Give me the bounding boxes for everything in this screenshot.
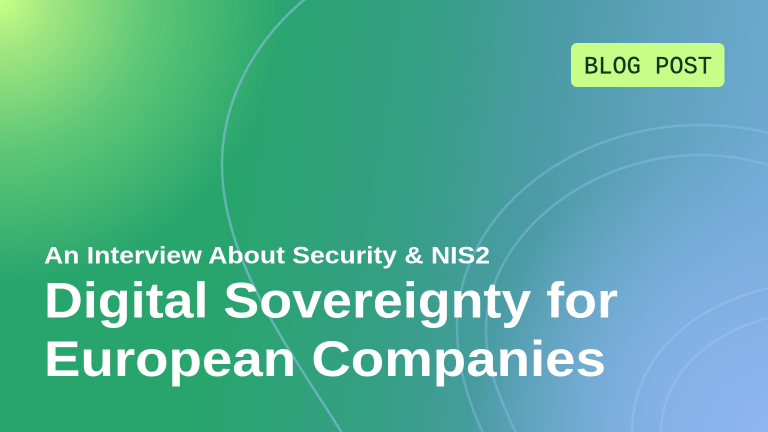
subtitle: An Interview About Security & NIS2 xyxy=(44,242,490,270)
title xyxy=(44,272,618,387)
title: European Companies xyxy=(44,331,606,387)
title: Digital Sovereignty for xyxy=(44,272,618,328)
badge: blog post: BLOG POST xyxy=(584,52,712,82)
